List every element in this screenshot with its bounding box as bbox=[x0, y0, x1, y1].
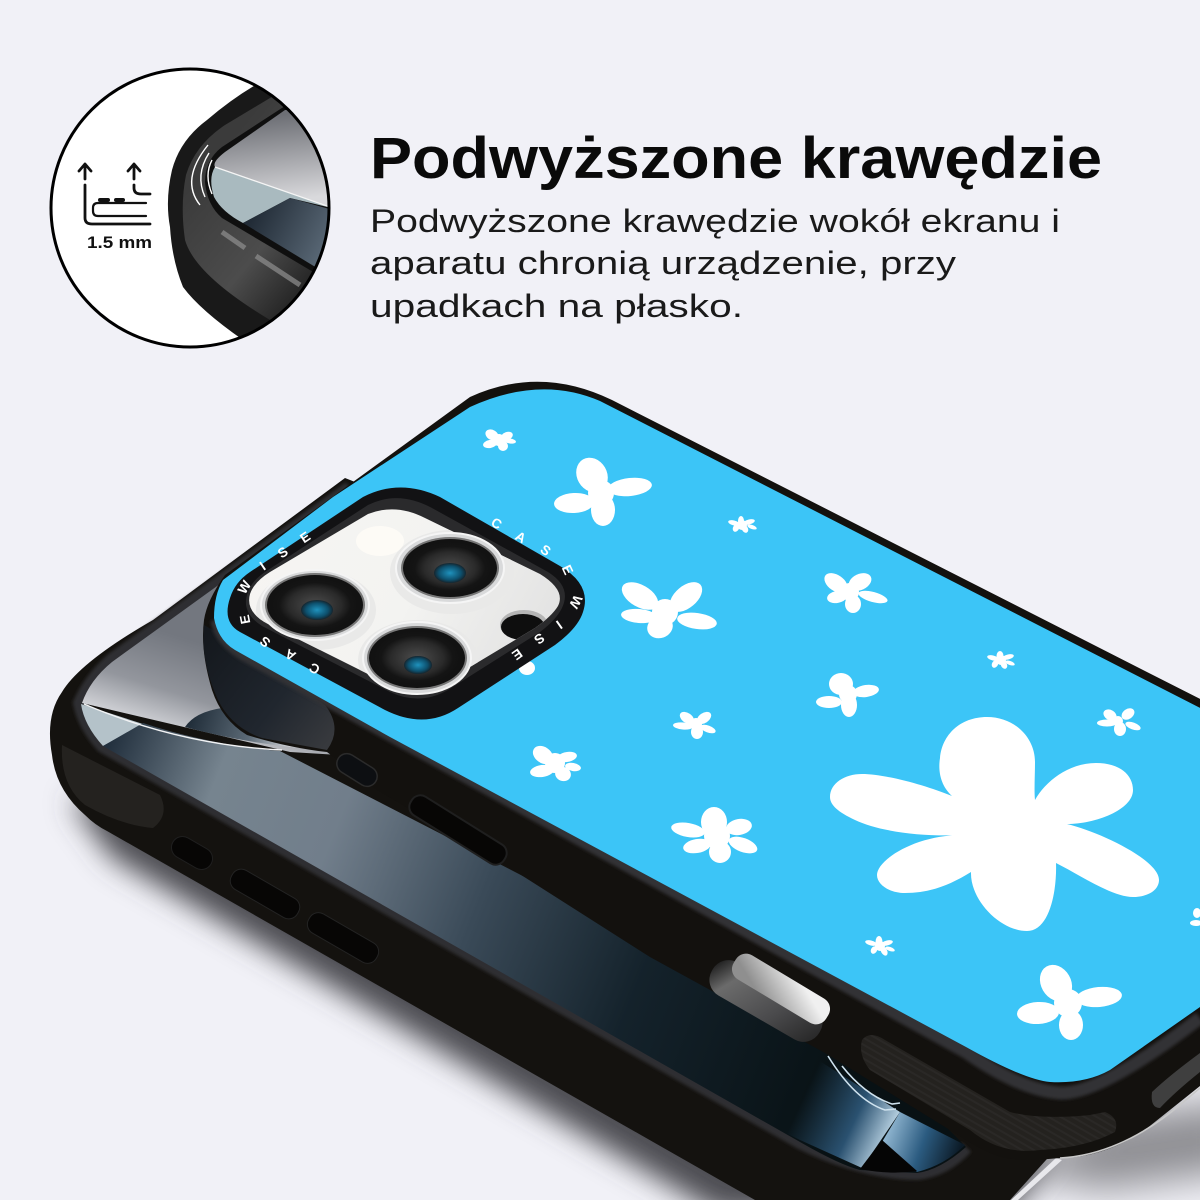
lens plateau bbox=[390, 530, 514, 614]
flower right bbox=[821, 569, 889, 613]
lower edge highlight bbox=[1060, 1088, 1200, 1158]
screen dark bbox=[243, 198, 328, 266]
close-up of case corner bbox=[168, 86, 328, 337]
camera window bbox=[249, 509, 560, 691]
glass edge line bbox=[215, 167, 330, 207]
flower medium centre bbox=[617, 576, 718, 642]
right arrow bbox=[128, 164, 140, 179]
reflection triangle bbox=[860, 1140, 917, 1173]
tray bbox=[93, 203, 146, 216]
microphone hole bbox=[500, 610, 548, 640]
flowers pattern bbox=[482, 427, 1200, 1040]
flower edge bbox=[1190, 908, 1200, 926]
inset circle: raised edge close-up bbox=[51, 69, 340, 347]
lens bottom bbox=[363, 622, 471, 694]
reflection left bbox=[700, 1060, 900, 1168]
flash bbox=[356, 526, 404, 556]
circle fill bbox=[51, 69, 329, 347]
front case bbox=[203, 382, 1200, 1160]
lens plateau bottom bbox=[358, 620, 478, 674]
flower far right bbox=[1097, 706, 1142, 736]
shadow under cases bbox=[70, 800, 1200, 1200]
volume button front bbox=[406, 792, 510, 868]
right port detail bbox=[1152, 1053, 1200, 1108]
thickness label: 1.5 mm bbox=[87, 233, 152, 252]
inner black rim bbox=[205, 107, 328, 271]
flower lower left bbox=[529, 742, 582, 783]
lens top right bbox=[396, 533, 504, 603]
flower star bbox=[728, 516, 757, 534]
left arrow bbox=[79, 164, 91, 179]
flower hidden by camera bbox=[519, 661, 535, 675]
back button: volume up bbox=[227, 865, 303, 923]
back button: volume down bbox=[304, 909, 382, 967]
case band bbox=[182, 97, 312, 320]
flower lower centre bbox=[670, 807, 759, 863]
back pad bbox=[62, 745, 164, 828]
outer bracket bbox=[85, 185, 150, 224]
rim highlight bbox=[217, 620, 1200, 1093]
camera ring text left: CASEWISE bbox=[237, 531, 319, 674]
phones illustration bbox=[50, 382, 1200, 1200]
case outer bbox=[168, 86, 272, 337]
screen blue back panel bbox=[214, 389, 1200, 1082]
flower lower small bbox=[673, 709, 717, 739]
camera ring text right: CASEWISE bbox=[492, 518, 583, 660]
screen wedge dark bbox=[185, 708, 300, 748]
impact arcs bbox=[192, 145, 212, 205]
back case port detail bbox=[1011, 1158, 1062, 1200]
circle outline bbox=[51, 69, 329, 347]
back screen bbox=[81, 490, 966, 1173]
description line 3: upadkach na płasko. bbox=[370, 288, 743, 324]
screen main bbox=[103, 723, 966, 1173]
glass highlight bbox=[84, 704, 282, 750]
mute switch bbox=[333, 750, 381, 790]
flower tiny right bbox=[987, 651, 1015, 670]
reflection right bbox=[882, 1112, 965, 1172]
camera inner bevel bbox=[246, 498, 565, 699]
title: Podwyższone krawędzie bbox=[370, 126, 1102, 191]
charge button surround bbox=[703, 954, 829, 1048]
reflection curves bbox=[828, 1056, 900, 1110]
flower butterfly mid bbox=[816, 673, 880, 717]
glass top bbox=[214, 110, 328, 206]
back case bbox=[50, 478, 1100, 1200]
front bottom pad bbox=[861, 1035, 1116, 1151]
flower tiny bottom bbox=[865, 936, 895, 957]
description line 2: aparatu chronią urządzenie, przy bbox=[370, 245, 956, 281]
back case rim highlight bbox=[80, 488, 966, 1173]
back button: power small bbox=[167, 832, 217, 874]
edge height icon bbox=[79, 164, 150, 224]
front case bump bbox=[203, 625, 335, 750]
camera ring bbox=[228, 488, 585, 720]
description bbox=[370, 203, 1060, 324]
lens left bbox=[261, 570, 369, 640]
flower large bbox=[830, 717, 1159, 931]
glass lower bbox=[211, 167, 340, 223]
lens plateau left bbox=[256, 579, 376, 650]
description line 1: Podwyższone krawędzie wokół ekranu i bbox=[370, 203, 1060, 239]
band highlight bbox=[222, 232, 300, 285]
camera lenses bbox=[256, 530, 511, 674]
flower butterfly bottom bbox=[1016, 959, 1123, 1040]
flower small top bbox=[482, 427, 516, 451]
tray bumps bbox=[100, 198, 123, 202]
flower butterfly top bbox=[554, 452, 653, 526]
right lip bbox=[134, 185, 150, 194]
charge button silver bbox=[728, 949, 834, 1029]
glass upper bbox=[82, 490, 420, 760]
glass lower left bbox=[81, 704, 143, 746]
